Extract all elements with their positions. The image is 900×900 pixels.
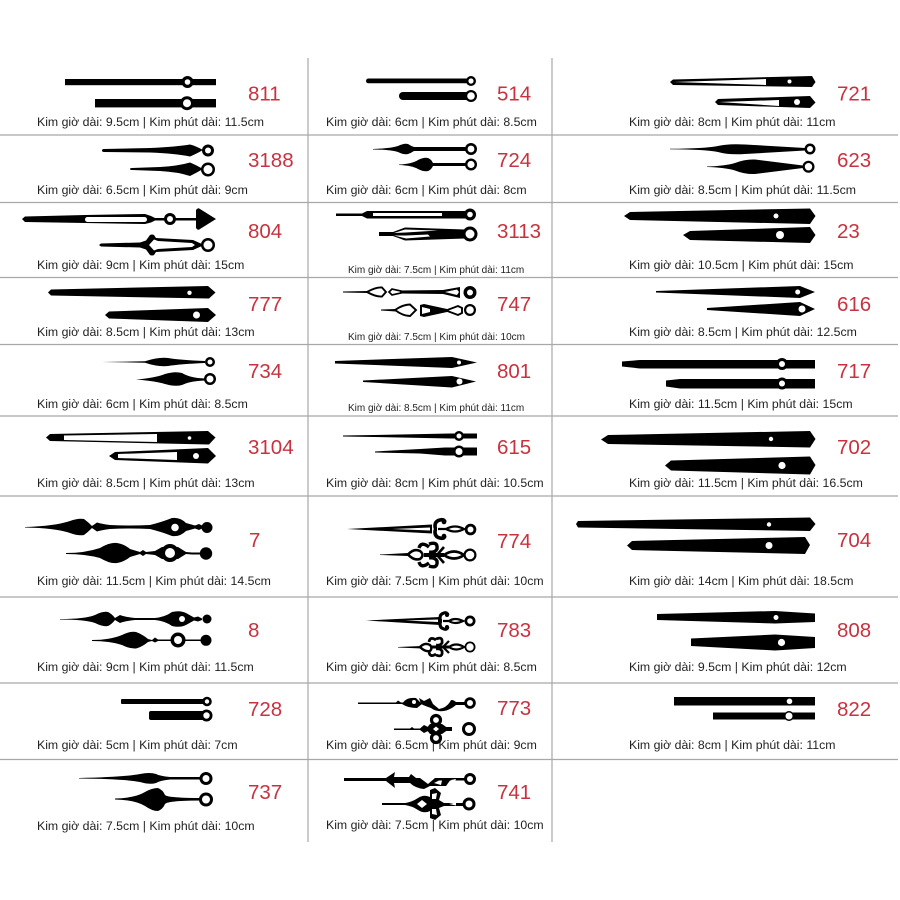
size caption: Kim giờ dài: 11.5cm | Kim phút dài: 15cm — [629, 397, 853, 411]
panel: model 3188 — [37, 144, 294, 197]
model number: 774 — [497, 530, 531, 553]
size caption: Kim giờ dài: 7.5cm | Kim phút dài: 10cm — [348, 332, 525, 343]
panel: model 804 — [22, 208, 282, 272]
model number: 7 — [249, 529, 260, 552]
hour hand — [343, 286, 476, 299]
size caption: Kim giờ dài: 8.5cm | Kim phút dài: 11.5cm — [629, 183, 856, 197]
hour hand — [670, 144, 816, 154]
minute hand — [115, 788, 213, 811]
hour hand — [366, 613, 476, 629]
model number: 721 — [837, 82, 871, 106]
hour hand — [22, 208, 216, 230]
panel: model 783 — [326, 613, 537, 674]
hour hand — [48, 286, 216, 298]
hour hand — [343, 431, 477, 441]
hour hand — [656, 286, 815, 298]
model number: 734 — [248, 360, 282, 383]
minute hand — [92, 632, 212, 649]
hour hand — [79, 772, 212, 785]
minute hand — [95, 96, 216, 110]
size caption: Kim giờ dài: 8.5cm | Kim phút dài: 11cm — [348, 403, 524, 414]
model number: 773 — [497, 697, 531, 720]
minute hand — [66, 543, 212, 563]
model number: 702 — [837, 436, 871, 459]
minute hand — [109, 448, 216, 464]
panel: model 23 — [624, 208, 860, 272]
size caption: Kim giờ dài: 9cm | Kim phút dài: 11.5cm — [37, 660, 254, 674]
hour hand — [335, 357, 477, 368]
size caption: Kim giờ dài: 7.5cm | Kim phút dài: 11cm — [348, 265, 524, 276]
model number: 822 — [837, 698, 871, 721]
panel: model 616 — [629, 286, 871, 339]
model number: 616 — [837, 293, 871, 316]
size caption: Kim giờ dài: 8.5cm | Kim phút dài: 12.5cm — [629, 325, 857, 339]
panel: model 8 — [37, 611, 259, 674]
hour hand — [60, 611, 212, 627]
model number: 3188 — [248, 149, 294, 172]
model number: 615 — [497, 436, 531, 459]
panel: model 808 — [629, 611, 871, 674]
size caption: Kim giờ dài: 8cm | Kim phút dài: 11cm — [629, 115, 836, 129]
hour hand — [102, 357, 215, 367]
model number: 777 — [248, 293, 282, 316]
size caption: Kim giờ dài: 6cm | Kim phút dài: 8.5cm — [326, 115, 537, 129]
minute hand — [130, 162, 215, 176]
minute hand — [399, 158, 477, 171]
model number: 704 — [837, 529, 871, 552]
minute hand — [666, 378, 815, 390]
hour hand — [670, 76, 816, 87]
size caption: Kim giờ dài: 11.5cm | Kim phút dài: 14.5cm — [37, 574, 271, 588]
panel: model 615 — [326, 431, 544, 490]
panel: model 514 — [326, 76, 537, 129]
size caption: Kim giờ dài: 7.5cm | Kim phút dài: 10cm — [326, 818, 544, 832]
size caption: Kim giờ dài: 7.5cm | Kim phút dài: 10cm — [37, 819, 255, 833]
panel: model 3104 — [37, 431, 294, 490]
model number: 747 — [497, 293, 531, 316]
panel: model 704 — [576, 518, 871, 588]
minute hand — [381, 304, 476, 317]
size caption: Kim giờ dài: 6cm | Kim phút dài: 8.5cm — [326, 660, 537, 674]
minute hand — [627, 537, 810, 554]
model number: 801 — [497, 360, 531, 383]
panel: model 702 — [601, 431, 871, 490]
hour hand — [25, 518, 212, 536]
model number: 3113 — [497, 220, 541, 243]
size caption: Kim giờ dài: 6cm | Kim phút dài: 8.5cm — [37, 397, 248, 411]
minute hand — [399, 90, 477, 102]
panel: model 734 — [37, 357, 282, 411]
model number: 728 — [248, 698, 282, 721]
minute hand — [665, 456, 816, 474]
hour hand — [373, 143, 477, 155]
model number: 783 — [497, 619, 531, 642]
panel: model 801 — [335, 357, 531, 414]
size caption: Kim giờ dài: 6.5cm | Kim phút dài: 9cm — [326, 738, 537, 752]
model number: 23 — [837, 220, 860, 243]
minute hand — [375, 446, 477, 458]
panel: model 777 — [37, 286, 282, 339]
model number: 804 — [248, 220, 282, 243]
panel: model 3113 — [336, 208, 541, 276]
panel: model 717 — [622, 358, 871, 411]
panel: model 721 — [629, 76, 871, 129]
minute hand — [707, 159, 814, 174]
hour hand — [65, 76, 216, 88]
minute hand — [398, 638, 476, 656]
hour hand — [674, 697, 815, 706]
panel: model 822 — [629, 697, 871, 752]
minute hand — [136, 372, 216, 386]
minute hand — [713, 711, 815, 721]
size caption: Kim giờ dài: 8.5cm | Kim phút dài: 13cm — [37, 325, 255, 339]
hour hand — [347, 520, 476, 538]
panel: model 724 — [326, 143, 531, 197]
hour hand — [102, 144, 214, 156]
model number: 811 — [248, 82, 281, 106]
model number: 623 — [837, 149, 871, 172]
size caption: Kim giờ dài: 10.5cm | Kim phút dài: 15cm — [629, 258, 854, 272]
model number: 737 — [248, 781, 282, 804]
panel: model 623 — [629, 144, 871, 197]
size caption: Kim giờ dài: 5cm | Kim phút dài: 7cm — [37, 738, 238, 752]
minute hand — [379, 226, 478, 242]
panel: model 773 — [326, 697, 537, 752]
size caption: Kim giờ dài: 8.5cm | Kim phút dài: 13cm — [37, 476, 255, 490]
hour hand — [657, 611, 815, 624]
panel: model 741 — [326, 772, 544, 832]
hour hand — [358, 697, 476, 711]
minute hand — [683, 227, 816, 243]
size caption: Kim giờ dài: 6cm | Kim phút dài: 8cm — [326, 183, 527, 197]
minute hand — [382, 788, 476, 820]
size caption: Kim giờ dài: 8cm | Kim phút dài: 10.5cm — [326, 476, 544, 490]
minute hand — [99, 234, 215, 256]
minute hand — [715, 96, 816, 108]
size caption: Kim giờ dài: 7.5cm | Kim phút dài: 10cm — [326, 574, 544, 588]
minute hand — [707, 302, 815, 316]
hour hand — [601, 431, 816, 448]
size caption: Kim giờ dài: 8cm | Kim phút dài: 11cm — [629, 738, 836, 752]
hour hand — [624, 208, 816, 224]
hour hand — [622, 358, 815, 370]
size caption: Kim giờ dài: 9.5cm | Kim phút dài: 12cm — [629, 660, 847, 674]
minute hand — [394, 716, 476, 742]
hour hand — [576, 518, 816, 531]
minute hand — [380, 543, 476, 567]
panel: model 774 — [326, 520, 544, 588]
model number: 741 — [497, 781, 531, 804]
panel: model 747 — [343, 286, 531, 343]
model number: 724 — [497, 149, 531, 172]
hour hand — [344, 772, 476, 789]
size caption: Kim giờ dài: 9cm | Kim phút dài: 15cm — [37, 258, 244, 272]
size caption: Kim giờ dài: 11.5cm | Kim phút dài: 16.5cm — [629, 476, 863, 490]
panel: model 811 — [37, 76, 281, 129]
size caption: Kim giờ dài: 9.5cm | Kim phút dài: 11.5cm — [37, 115, 264, 129]
hour hand — [46, 431, 216, 444]
model number: 808 — [837, 619, 871, 642]
size caption: Kim giờ dài: 6.5cm | Kim phút dài: 9cm — [37, 183, 248, 197]
panel: model 737 — [37, 772, 282, 833]
minute hand — [363, 376, 476, 388]
model number: 8 — [248, 619, 259, 642]
panel: model 7 — [25, 518, 271, 588]
panel: model 728 — [37, 697, 282, 752]
minute hand — [149, 710, 212, 722]
minute hand — [105, 308, 216, 322]
hour hand — [121, 697, 212, 706]
hour hand — [366, 76, 476, 86]
minute hand — [691, 634, 815, 650]
model number: 3104 — [248, 436, 294, 459]
size caption: Kim giờ dài: 14cm | Kim phút dài: 18.5cm — [629, 574, 854, 588]
model number: 717 — [837, 360, 871, 383]
model number: 514 — [497, 82, 531, 106]
hour hand — [336, 208, 476, 220]
